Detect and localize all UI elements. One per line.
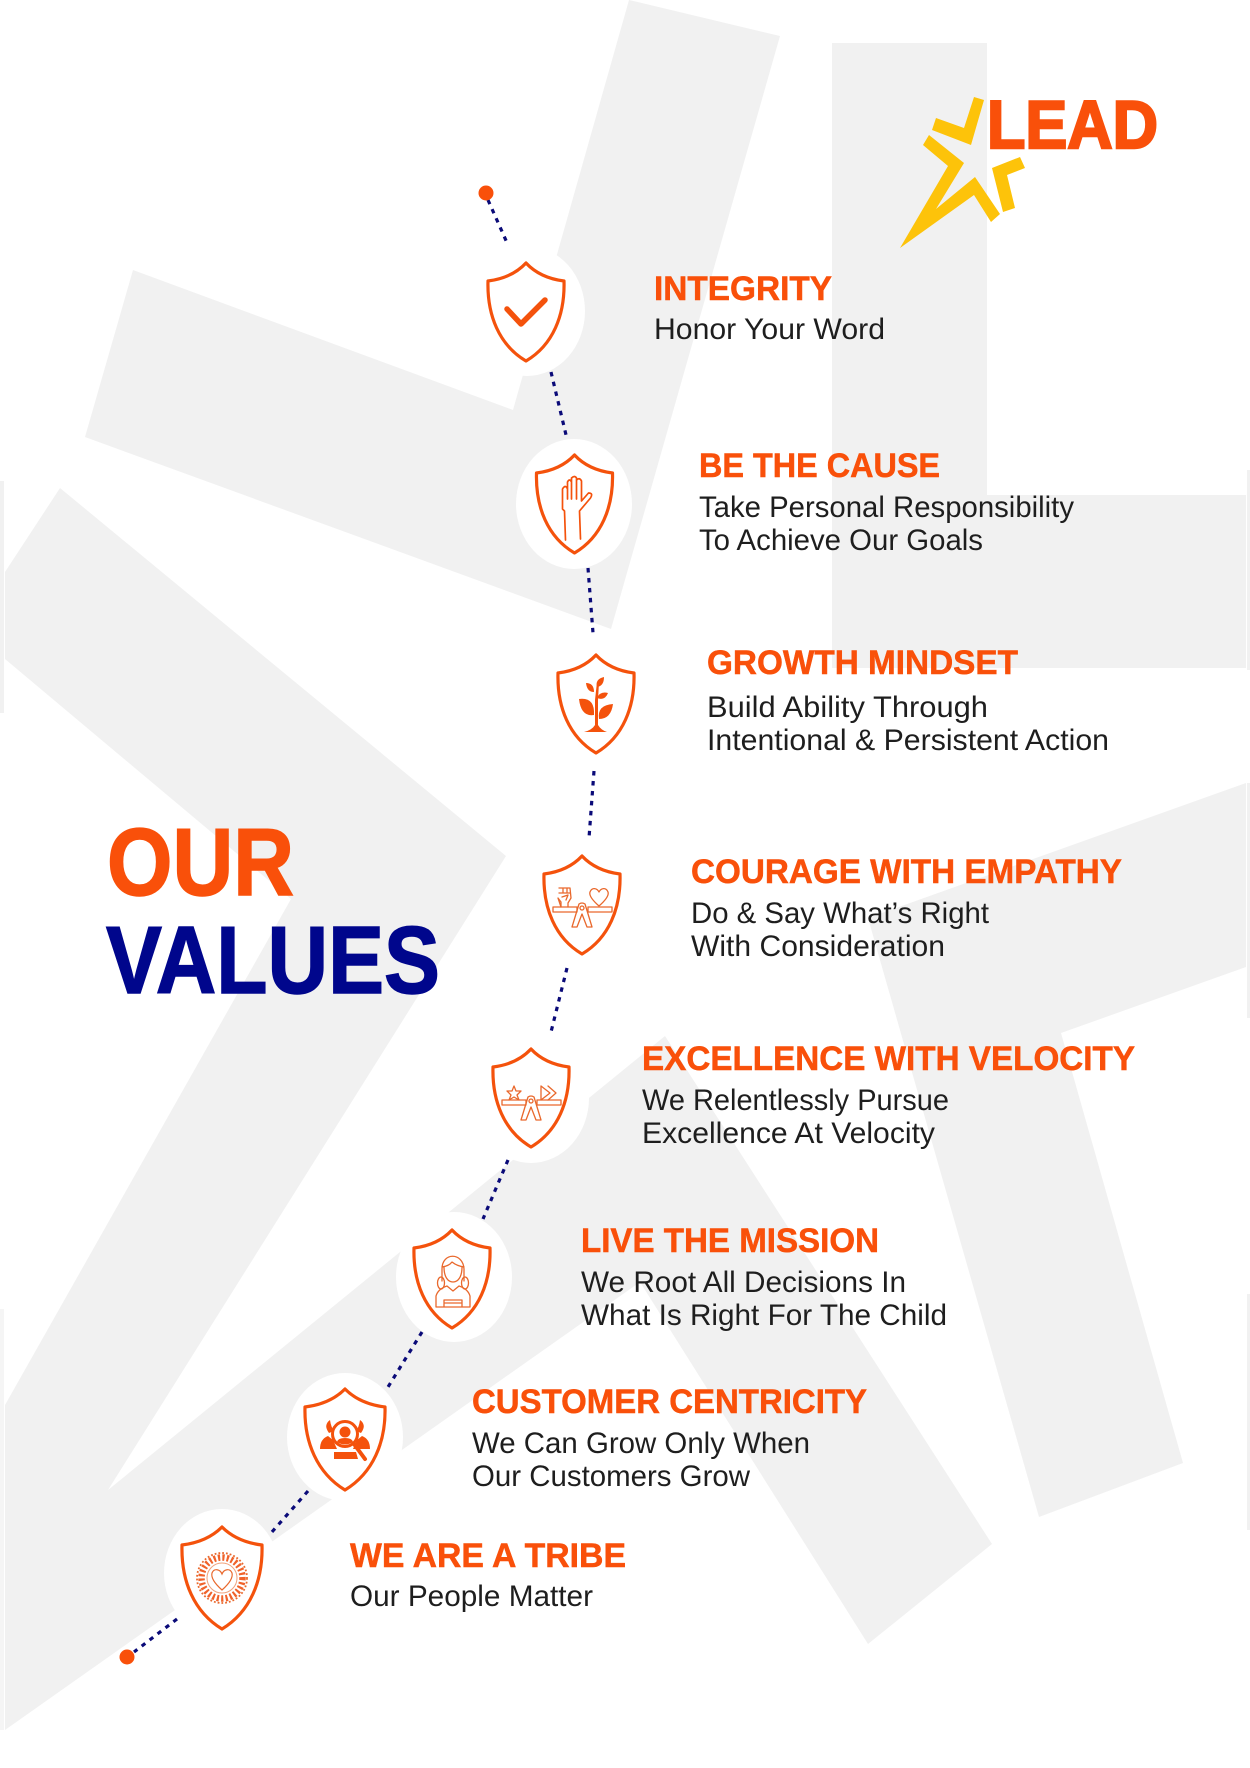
value: customer centricity: [472, 1383, 867, 1493]
dashed path connecting the values: [134, 200, 594, 1652]
description: Do & Say What’s Right: [691, 897, 989, 930]
description: Intentional & Persistent Action: [707, 724, 1109, 757]
value: courage with empathy: [691, 853, 1122, 963]
white halos behind shields: [164, 246, 654, 1637]
heading: LIVE THE MISSION: [581, 1222, 879, 1260]
title: Our Values: [106, 809, 440, 1014]
description: [707, 691, 1109, 757]
description: Our Customers Grow: [472, 1460, 751, 1493]
value: growth mindset: [707, 644, 1109, 757]
icon: customer centricity shield: [305, 1389, 385, 1490]
icon: excellence with velocity shield: [493, 1049, 569, 1147]
logo: LEAD star and wordmark: [900, 87, 1158, 248]
description: To Achieve Our Goals: [699, 524, 983, 557]
icon: yellow star: [900, 97, 1025, 248]
description: Honor Your Word: [654, 313, 885, 346]
description: [472, 1427, 810, 1493]
description: Our People Matter: [350, 1580, 593, 1613]
logo wordmark: LEAD: [987, 87, 1158, 163]
description: [699, 491, 1074, 557]
value: integrity: [654, 270, 885, 346]
heading: EXCELLENCE WITH VELOCITY: [642, 1040, 1135, 1078]
path start dot: [478, 186, 494, 200]
value: live the mission: [581, 1222, 947, 1332]
icon: live the mission shield: [414, 1230, 490, 1328]
icon: courage with empathy shield: [544, 856, 620, 954]
description: What Is Right For The Child: [581, 1299, 947, 1332]
description: We Root All Decisions In: [581, 1266, 906, 1299]
heading: INTEGRITY: [654, 270, 832, 308]
heading: COURAGE WITH EMPATHY: [691, 853, 1122, 891]
title line: OUR: OUR: [107, 809, 294, 916]
description: Excellence At Velocity: [642, 1117, 935, 1150]
heading: WE ARE A TRIBE: [350, 1537, 626, 1575]
description: Take Personal Responsibility: [699, 491, 1074, 524]
icon: be the cause shield: [536, 455, 613, 553]
heading: BE THE CAUSE: [699, 447, 940, 485]
title line: VALUES: VALUES: [106, 907, 440, 1014]
description: [581, 1266, 947, 1332]
description: With Consideration: [691, 930, 945, 963]
icon: we are a tribe shield: [182, 1527, 262, 1629]
description: We Relentlessly Pursue: [642, 1084, 949, 1117]
description: [642, 1084, 949, 1150]
icon: growth mindset shield: [558, 655, 634, 753]
heading: CUSTOMER CENTRICITY: [472, 1383, 867, 1421]
description: [691, 897, 989, 963]
value: be the cause: [699, 447, 1074, 557]
heading: GROWTH MINDSET: [707, 644, 1018, 682]
value: excellence with velocity: [642, 1040, 1135, 1150]
icon: integrity shield: [488, 263, 564, 361]
description: We Can Grow Only When: [472, 1427, 810, 1460]
path end dot: [120, 1650, 134, 1664]
value: we are a tribe: [350, 1537, 626, 1613]
description: Build Ability Through: [707, 691, 988, 724]
